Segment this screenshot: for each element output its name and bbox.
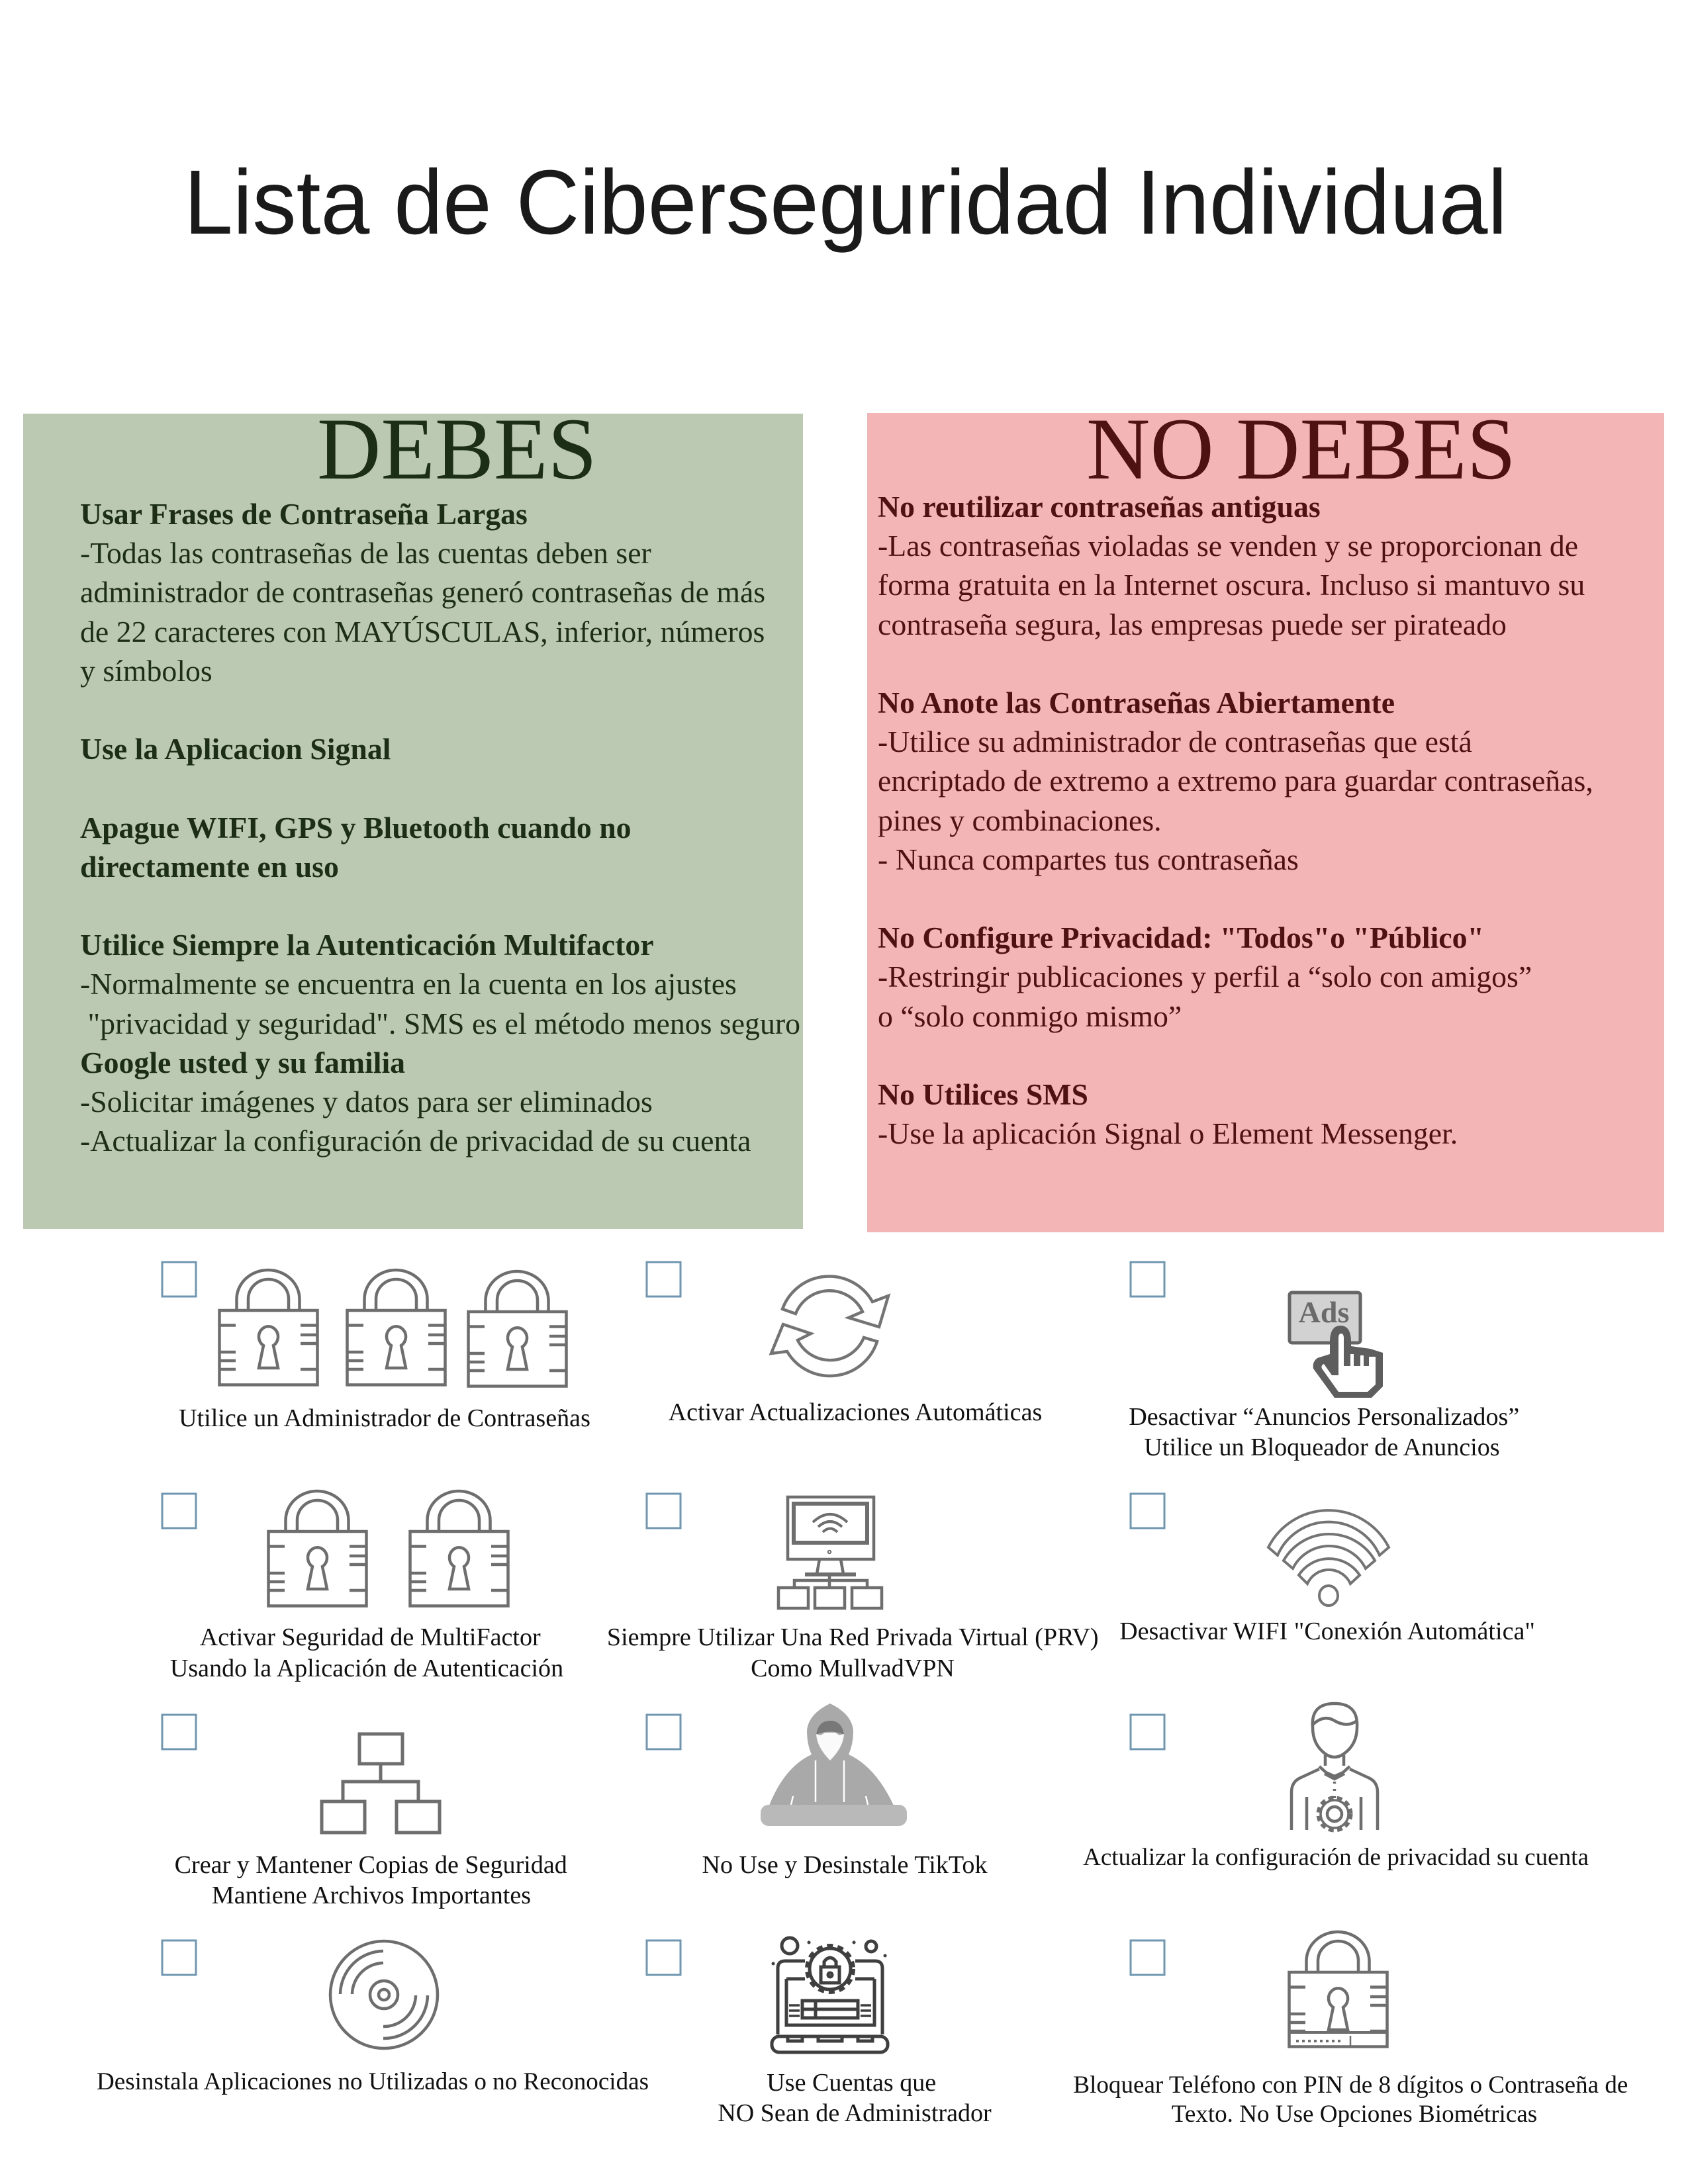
label: Actualizar la configuración de privacidad su cuenta xyxy=(1083,1844,1589,1871)
title: Lista de Ciberseguridad Individual xyxy=(184,152,1507,253)
item: copias de seguridad xyxy=(162,1715,573,1909)
label: NO Sean de Administrador xyxy=(718,2099,992,2127)
icon: refresh arrows xyxy=(771,1277,888,1376)
item: wifi xyxy=(1119,1494,1535,1645)
heading: no debes: NO DEBES xyxy=(1086,400,1516,498)
icon: disc xyxy=(330,1941,438,2048)
label: Desactivar WIFI "Conexión Automática" xyxy=(1119,1617,1535,1645)
item: aplicaciones xyxy=(97,1940,649,2095)
icon: laptop with gear lock xyxy=(772,1938,888,2052)
heading: debes: DEBES xyxy=(317,400,597,498)
icon: ads click xyxy=(1289,1293,1383,1398)
label: Activar Actualizaciones Automáticas xyxy=(669,1398,1042,1426)
checkbox xyxy=(647,1262,680,1297)
text block: no debes list: No reutilizar contraseñas antiguas -Las contraseñas violadas se venden y se proporcionan de forma gratuita en la Internet oscura. Incluso si mantuvo su contraseña segura, las empresas puede ser pirateado No Anote las Contraseñas Abiertamente -Utilice su administrador de contraseñas que está encriptado de extremo a extremo para guardar contraseñas, pines y combinaciones. - Nunca compartes tus contraseñas No Configure Privacidad: "Todos"o "Público" -Restringir publicaciones y perfil a “solo con amigos” o “solo conmigo mismo” No Utilices SMS -Use la aplicación Signal o Element Messenger. xyxy=(878,490,1593,1150)
checkbox xyxy=(1131,1262,1164,1297)
checkbox xyxy=(162,1494,196,1528)
icon: person with gear xyxy=(1291,1704,1378,1831)
checkbox xyxy=(647,1940,680,1975)
item: administrador de contraseñas xyxy=(162,1262,590,1432)
item: privacidad xyxy=(1083,1704,1589,1871)
label: Texto. No Use Opciones Biométricas xyxy=(1172,2101,1537,2128)
icon: two padlocks xyxy=(268,1491,508,1606)
icon: hooded figure xyxy=(761,1704,907,1826)
checkbox xyxy=(162,1262,196,1297)
icon: ads click: Ads xyxy=(1299,1295,1349,1329)
icon: padlock with pin xyxy=(1289,1932,1387,2046)
label: Crear y Mantener Copias de Seguridad xyxy=(175,1851,567,1879)
label: Utilice un Bloqueador de Anuncios xyxy=(1144,1433,1500,1461)
label: Como MullvadVPN xyxy=(751,1655,955,1682)
label: No Use y Desinstale TikTok xyxy=(702,1851,988,1879)
item: cuentas xyxy=(647,1938,992,2127)
label: Siempre Utilizar Una Red Privada Virtual (PRV) xyxy=(607,1623,1099,1651)
panel: debes xyxy=(23,414,803,1229)
checkbox xyxy=(162,1940,196,1975)
text block: debes list: Usar Frases de Contraseña Largas -Todas las contraseñas de las cuentas deben ser administrador de contraseñas generó contraseñas de más de 22 caracteres con MAYÚSCULAS, inferior, números y símbolos Use la Aplicacion Signal Apague WIFI, GPS y Bluetooth cuando no directamente en uso Utilice Siempre la Autenticación Multifactor -Normalmente se encuentra en la cuenta en los ajustes "privacidad y seguridad". SMS es el método menos seguro Google usted y su familia -Solicitar imágenes y datos para ser eliminados -Actualizar la configuración de privacidad de su cuenta xyxy=(80,497,800,1158)
label: Desactivar “Anuncios Personalizados” xyxy=(1129,1403,1519,1431)
item: actualizaciones xyxy=(647,1262,1042,1426)
icon: three padlocks xyxy=(219,1270,567,1386)
panel: no debes xyxy=(867,413,1664,1232)
item: tiktok xyxy=(647,1704,988,1879)
checkbox xyxy=(1131,1715,1164,1749)
label: Usando la Aplicación de Autenticación xyxy=(170,1655,563,1682)
item: anuncios xyxy=(1129,1262,1526,1461)
icon: networked computer xyxy=(778,1497,882,1608)
label: Utilice un Administrador de Contraseñas xyxy=(179,1404,590,1432)
label: Use Cuentas que xyxy=(767,2069,936,2097)
checkbox xyxy=(1131,1494,1164,1528)
item: multifactor xyxy=(162,1491,563,1682)
icon: backup hierarchy xyxy=(322,1734,440,1833)
item: bloqueo de teléfono xyxy=(1073,1932,1634,2128)
label: Mantiene Archivos Importantes xyxy=(212,1882,531,1909)
checkbox xyxy=(647,1494,680,1528)
label: Desinstala Aplicaciones no Utilizadas o no Reconocidas xyxy=(97,2068,649,2095)
label: Activar Seguridad de MultiFactor xyxy=(200,1623,541,1651)
icon: wifi xyxy=(1268,1510,1389,1606)
checkbox xyxy=(1131,1940,1164,1975)
label: Bloquear Teléfono con PIN de 8 dígitos o Contraseña de xyxy=(1073,2071,1628,2099)
item: vpn xyxy=(607,1494,1105,1682)
checkbox xyxy=(162,1715,196,1749)
checkbox xyxy=(647,1715,680,1749)
